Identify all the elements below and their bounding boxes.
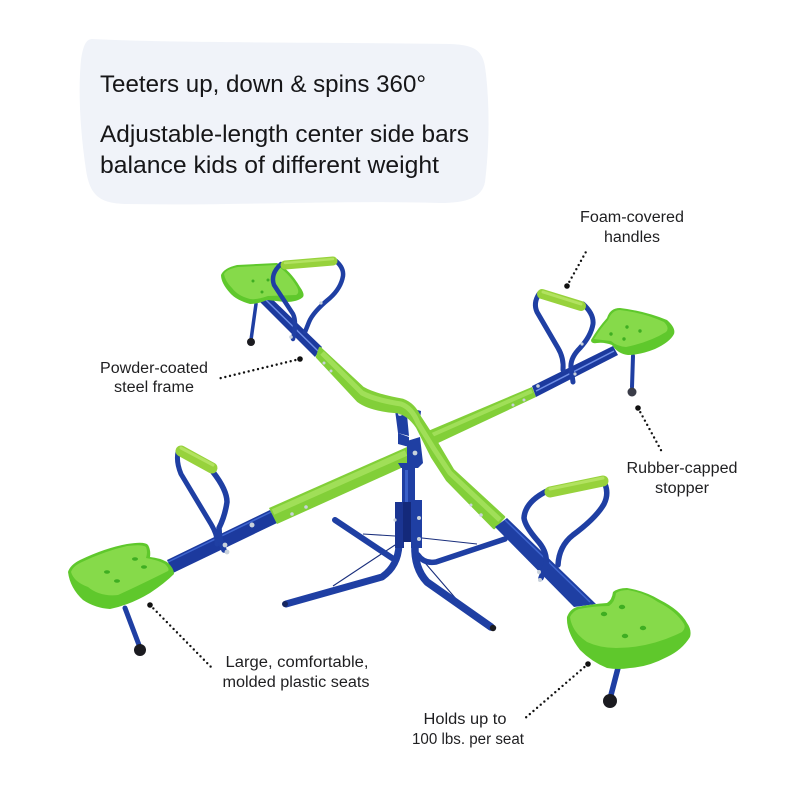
- stopper leg: [632, 356, 633, 387]
- stopper leg: [125, 608, 139, 645]
- callout: weight capacity: Holds up to: [424, 711, 506, 728]
- beam: lower-left to upper-right: [167, 346, 618, 573]
- callout: large molded plastic seats: Large, comfortable,: [226, 654, 368, 671]
- handle: [273, 264, 295, 339]
- callout: foam-covered handles: handles: [604, 229, 660, 246]
- callout: weight capacity: [412, 661, 591, 748]
- stopper leg: [611, 668, 618, 695]
- plastic seat: [591, 308, 674, 355]
- seat group: top-right: [535, 292, 674, 396]
- callout: foam-covered handles: [564, 209, 684, 289]
- text: adjustable bars feature: [100, 121, 469, 179]
- callout: powder-coated steel frame: [100, 356, 303, 396]
- handle: [177, 452, 217, 544]
- callout: weight capacity: 100 lbs. per seat: [412, 731, 525, 748]
- callout: rubber-capped stopper: [626, 405, 738, 497]
- callout: powder-coated steel frame: Powder-coated: [100, 360, 208, 377]
- text: adjustable bars feature: Adjustable-length center side bars: [100, 121, 469, 148]
- base legs and post: [282, 466, 505, 631]
- stopper leg: [251, 304, 256, 340]
- plastic seat: [221, 263, 304, 304]
- text: spin feature: Teeters up, down & spins 360°: [100, 71, 426, 98]
- callout: rubber-capped stopper: Rubber-capped: [626, 460, 738, 477]
- seat group: lower-left: [68, 448, 229, 656]
- callout: large molded plastic seats: [147, 602, 370, 691]
- plastic seat: [68, 543, 174, 609]
- text: adjustable bars feature: balance kids of different weight: [100, 152, 439, 179]
- handle: [535, 294, 563, 370]
- callout: large molded plastic seats: molded plastic seats: [222, 674, 370, 691]
- seat group: lower-right: [524, 478, 691, 708]
- callout: rubber-capped stopper: stopper: [655, 480, 709, 497]
- plastic seat: [567, 588, 691, 669]
- handle: [524, 491, 547, 578]
- panel: feature summary: [80, 39, 489, 204]
- callout: powder-coated steel frame: steel frame: [114, 379, 194, 396]
- bracket front plate: [398, 412, 423, 468]
- seat group: top-left: [221, 259, 343, 346]
- callout: foam-covered handles: Foam-covered: [580, 209, 684, 226]
- bracket back plate: [395, 408, 421, 447]
- beam: upper-left to lower-right: [258, 293, 596, 607]
- illustration: four-seat spinning seesaw: [68, 259, 691, 708]
